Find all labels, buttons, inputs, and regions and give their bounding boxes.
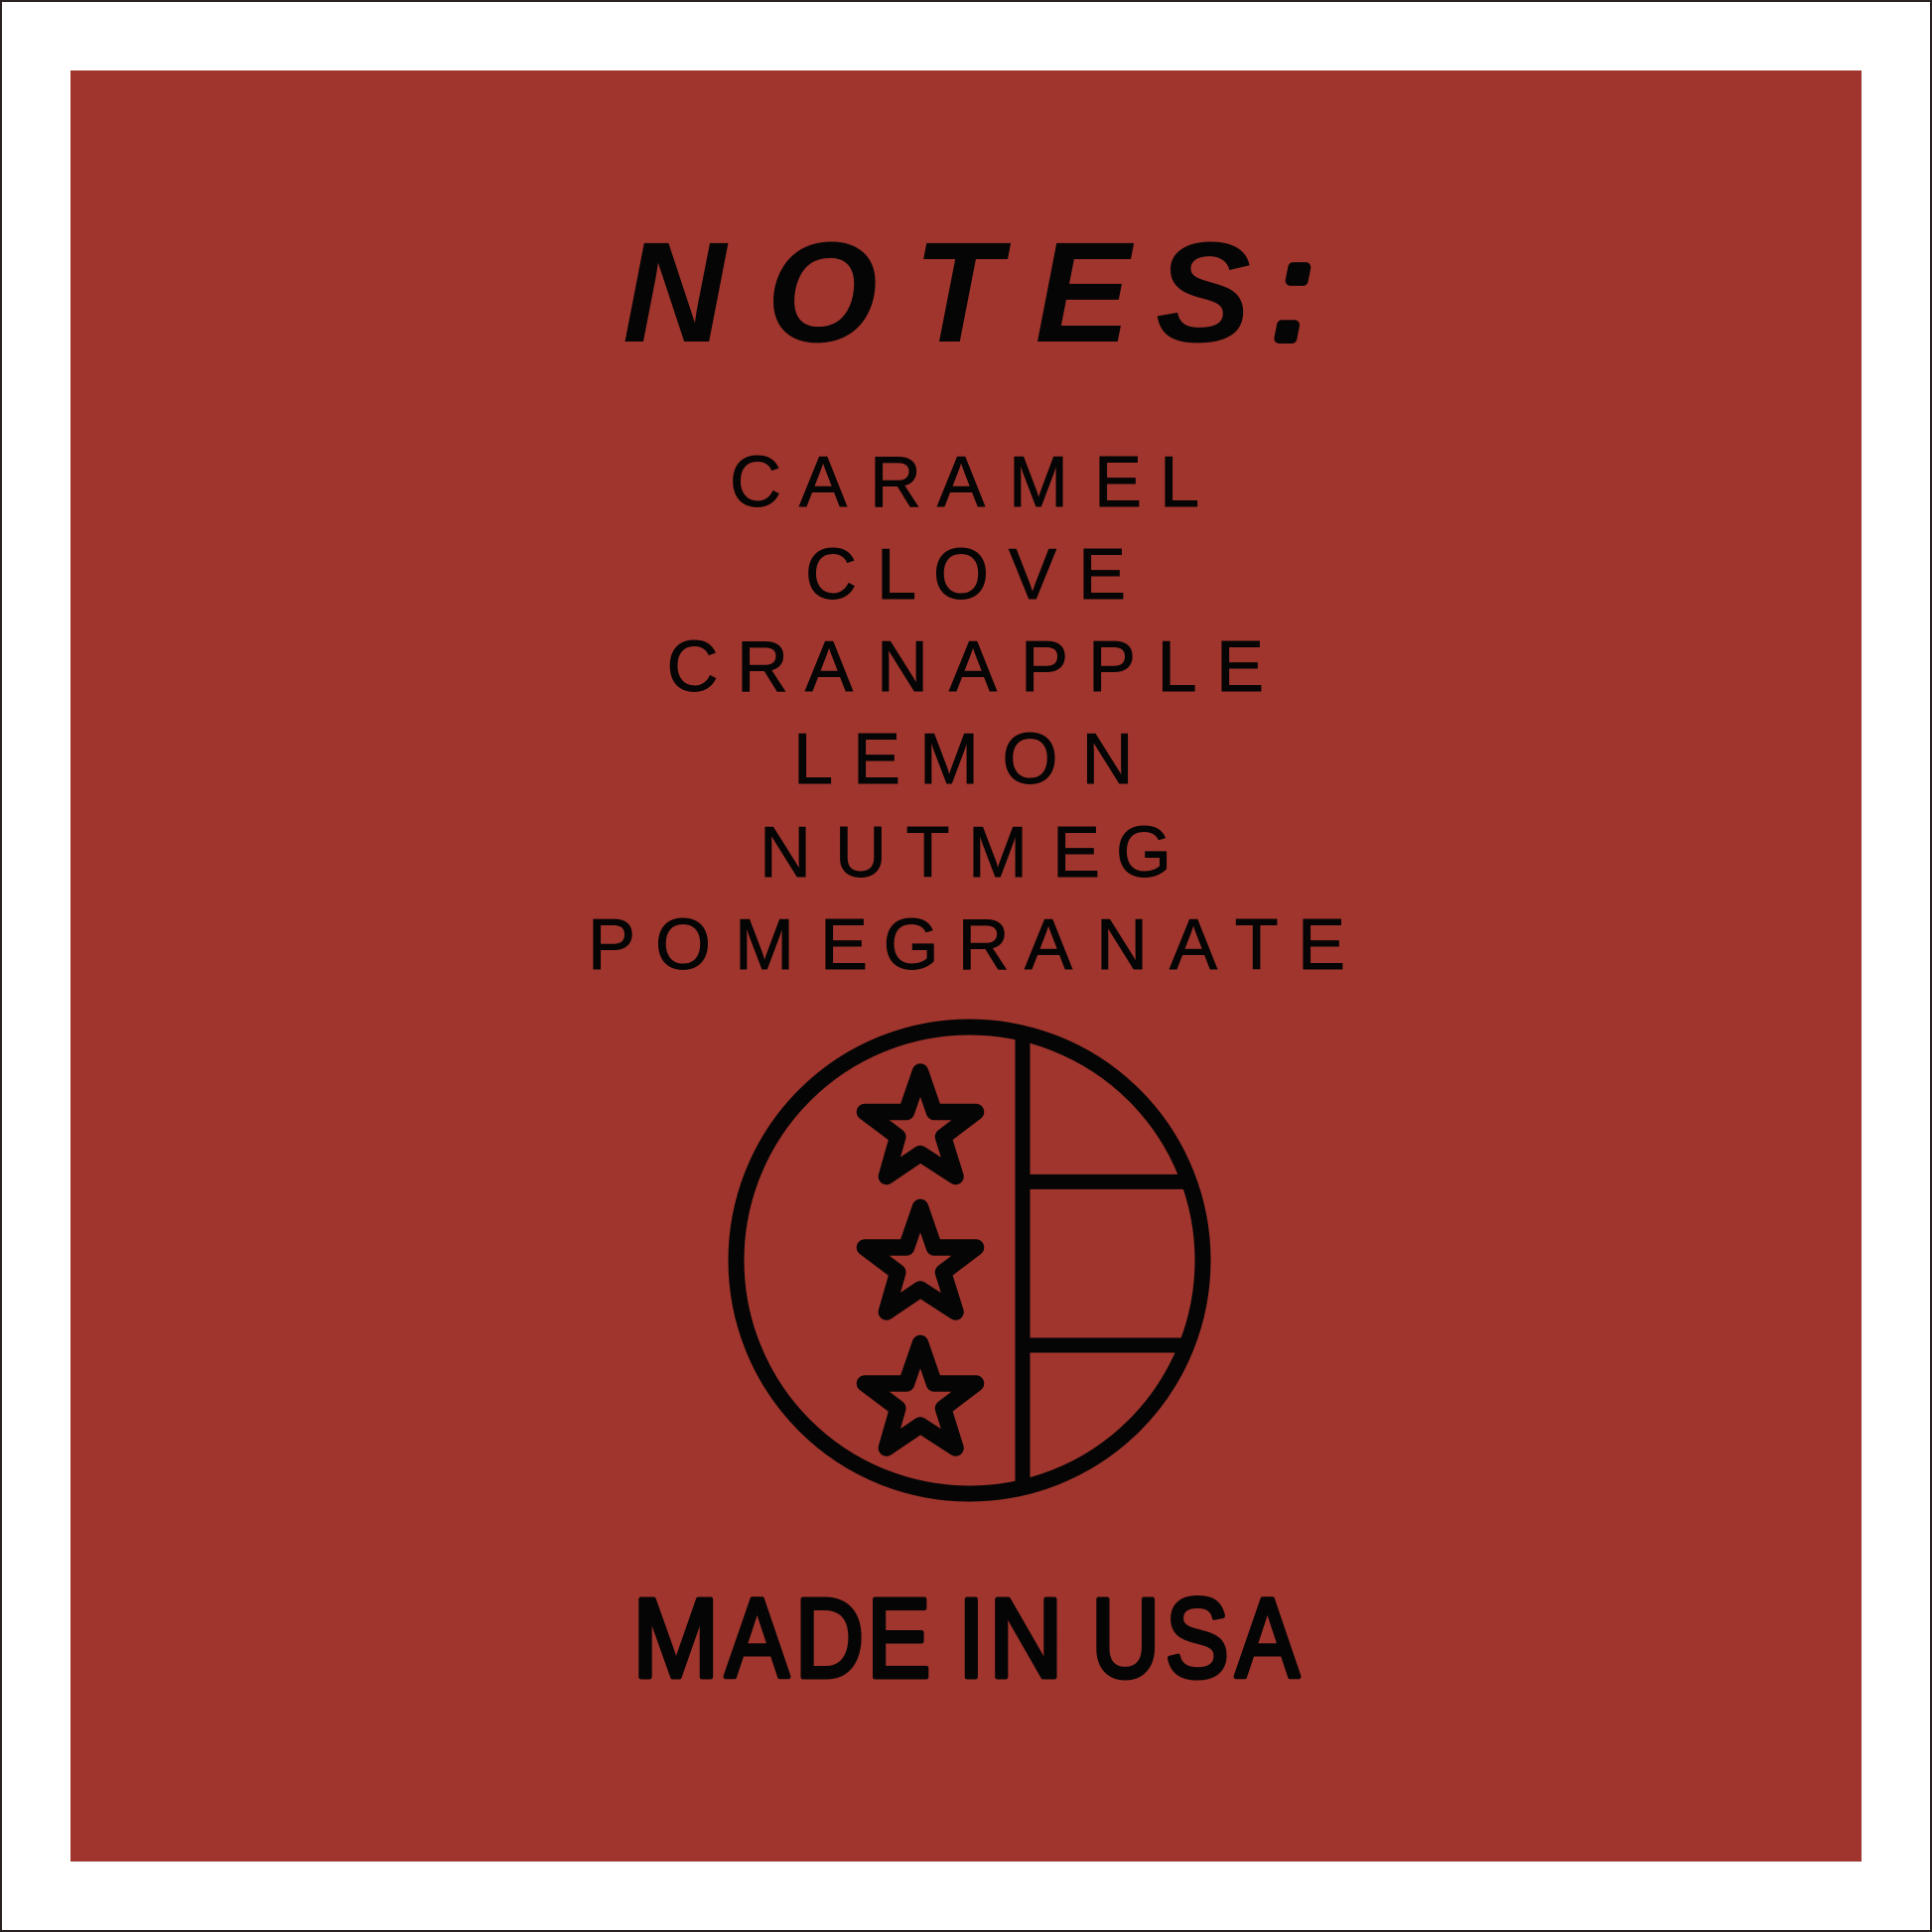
icon: bottom star	[865, 1343, 976, 1448]
note: cranapple: CRANAPPLE	[667, 627, 1264, 707]
icon: middle star	[865, 1207, 976, 1312]
icon: top star	[865, 1072, 976, 1176]
made in usa label	[632, 1576, 1300, 1702]
note: pomegranate: POMEGRANATE	[588, 905, 1345, 985]
note: nutmeg: NUTMEG	[759, 813, 1172, 893]
note: lemon: LEMON	[793, 720, 1134, 799]
word: ADE of MADE: ADE	[725, 1577, 930, 1702]
word: N of IN: N	[989, 1576, 1063, 1701]
list of flavour notes	[588, 443, 1345, 985]
icon: round flag with three stars	[737, 1027, 1203, 1493]
title: :	[1274, 216, 1311, 367]
note: caramel: CARAMEL	[730, 443, 1199, 522]
word: USA: USA	[1091, 1577, 1300, 1702]
word: IN: I	[958, 1577, 985, 1702]
word: M of MADE: M	[632, 1577, 720, 1702]
note: clove: CLOVE	[805, 535, 1126, 615]
title: NOTES	[622, 212, 1251, 372]
icon: lower flag stripe	[1023, 1338, 1187, 1352]
icon: flag vertical bar	[1015, 1033, 1031, 1488]
icon: upper flag stripe	[1023, 1174, 1190, 1189]
icon: circle outline	[737, 1027, 1203, 1493]
